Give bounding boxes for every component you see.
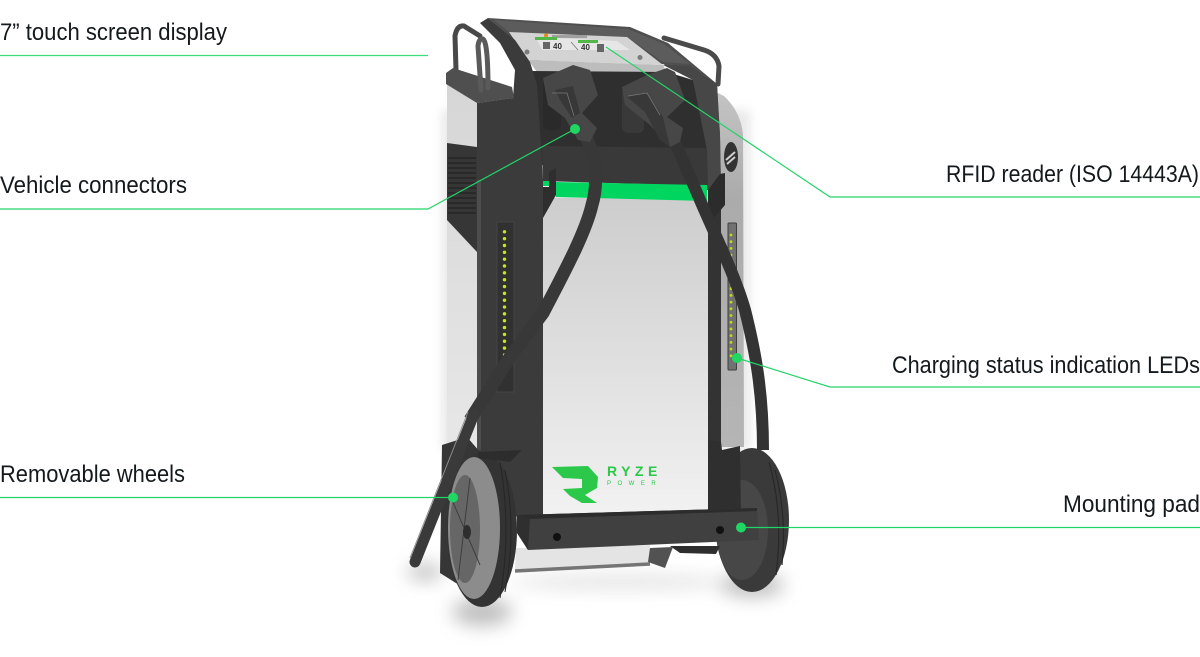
touch screen bbox=[535, 34, 630, 52]
rear bracket bbox=[648, 547, 673, 568]
cable over wheel bbox=[410, 412, 474, 562]
RYZE logo: POWER bbox=[607, 481, 662, 487]
front handle left bbox=[478, 39, 488, 90]
dock recess bbox=[530, 71, 709, 165]
right handle bbox=[664, 38, 719, 84]
right connector bbox=[622, 68, 685, 147]
touch screen: 40 bbox=[581, 43, 590, 52]
label: vehicle connectors: Vehicle connectors bbox=[0, 172, 187, 199]
top bezel bbox=[488, 18, 721, 190]
centre panel bbox=[542, 198, 710, 518]
wheel arch bbox=[478, 450, 522, 462]
shelf bbox=[542, 146, 708, 186]
mounting pad bar bbox=[517, 508, 759, 550]
left side panel bbox=[447, 84, 478, 470]
touch screen: 40 bbox=[553, 42, 562, 51]
underside shade bbox=[670, 546, 720, 554]
left wheel bbox=[447, 453, 517, 607]
handle base bbox=[446, 68, 514, 103]
rear fender bbox=[440, 437, 480, 590]
vent grille bbox=[447, 143, 477, 252]
bezel rim bbox=[494, 20, 690, 64]
RYZE logo: RYZE bbox=[607, 463, 662, 479]
label: touch screen display: 7” touch screen display bbox=[0, 19, 227, 46]
control panel bbox=[509, 32, 663, 65]
label: removable wheels: Removable wheels bbox=[0, 461, 185, 488]
RYZE logo bbox=[552, 463, 662, 503]
LED strip left bbox=[497, 222, 514, 392]
left connector bbox=[543, 65, 598, 142]
rear plate shading bbox=[515, 545, 650, 570]
green stripe bbox=[556, 182, 707, 201]
rear axle bbox=[515, 564, 650, 571]
LED strip right bbox=[728, 223, 736, 370]
cable right bbox=[672, 135, 763, 450]
right wheel bbox=[715, 448, 789, 592]
column edge bbox=[477, 180, 481, 450]
right dark column bbox=[708, 185, 721, 447]
right pillar bbox=[663, 65, 721, 190]
right side panel bbox=[716, 92, 744, 447]
label: removable wheels bbox=[0, 461, 458, 502]
charge port bbox=[724, 142, 738, 172]
hook left bbox=[542, 168, 556, 218]
body shadow bbox=[442, 110, 750, 450]
left holster bbox=[543, 78, 561, 130]
label: vehicle connectors bbox=[0, 124, 580, 209]
label: mounting pad bbox=[736, 491, 1200, 532]
label: RFID reader bbox=[606, 47, 1200, 197]
cable left bbox=[470, 134, 596, 420]
hook right bbox=[708, 173, 725, 222]
ground shadows bbox=[407, 564, 784, 626]
charger product illustration bbox=[410, 18, 789, 607]
panel screws bbox=[524, 50, 642, 60]
rear handle left bbox=[455, 26, 480, 70]
right holster bbox=[622, 87, 644, 133]
left body column and shoulder bbox=[477, 18, 543, 518]
label: charging status LEDs bbox=[732, 352, 1200, 387]
